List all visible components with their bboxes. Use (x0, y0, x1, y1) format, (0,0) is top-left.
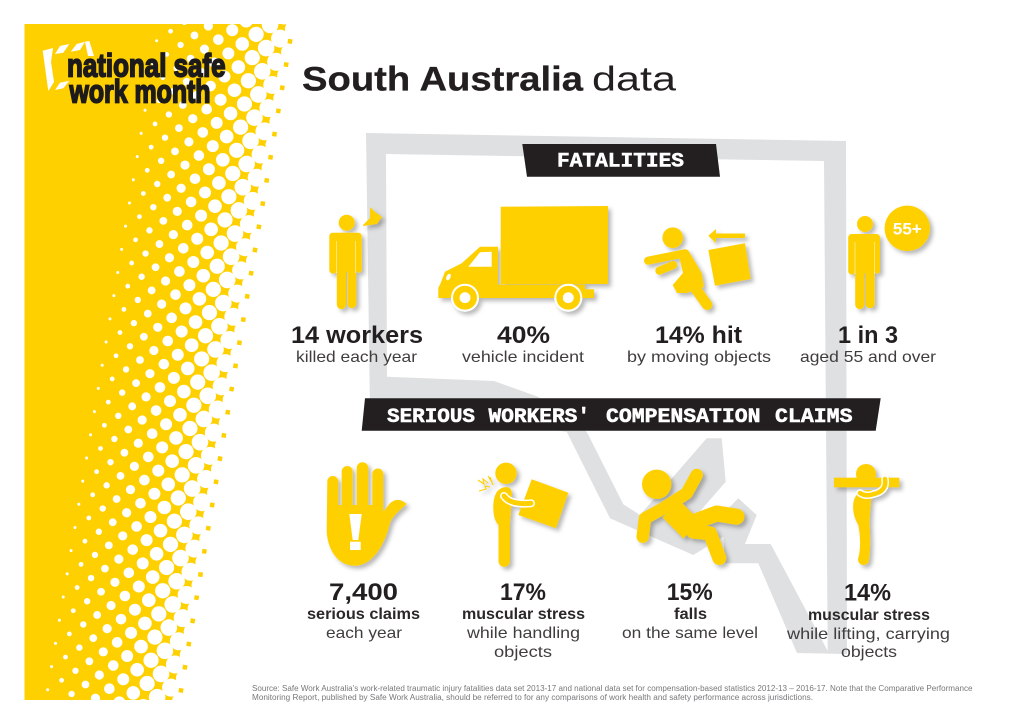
stat: 17% muscular stress while handling objects: 17% (500, 579, 546, 606)
banner: fatalities (522, 144, 720, 177)
icon: raised hand with exclamation (327, 462, 407, 566)
map outline: South Australia (366, 133, 847, 654)
source note: Source: Safe Work Australia's work-related traumatic injury fatalities data set 2013-17 and national data set for compensation-based statistics 2012-13 – 2016-17. Note that the Comparative Performance (252, 684, 973, 693)
stat: 14% muscular stress while lifting, carrying objects: muscular stress (808, 607, 930, 624)
banner: serious workers' compensation claims: SERIOUS (387, 406, 475, 429)
stat: 14% hit by moving objects (627, 322, 771, 366)
title: South Australia (302, 60, 584, 98)
logo: national safe work month: national safe (67, 48, 226, 84)
stat: 17% muscular stress while handling objects: muscular stress (462, 606, 585, 623)
stat: 40% vehicle incident (462, 322, 585, 366)
source note: Monitoring Report, published by Safe Work Australia, should be referred to for any comparisons of work health and safety performance across jurisdictions. (252, 693, 813, 702)
stat: 14 workers killed each year: 14 workers (291, 322, 423, 349)
source note (252, 684, 973, 702)
logo: national safe work month (43, 41, 226, 110)
icon: fall on the same level (642, 470, 736, 558)
stat: 40% vehicle incident: vehicle incident (462, 349, 585, 366)
banner: serious workers' compensation claims: CLAIMS (775, 406, 852, 429)
banner: serious workers' compensation claims: COMPENSATION (606, 406, 760, 429)
icon: delivery truck (438, 206, 608, 312)
stat: 15% falls on the same level: falls (674, 606, 707, 623)
stat: 7,400 serious claims each year (307, 579, 420, 642)
icon: worker with arrow (329, 207, 382, 309)
stat: 1 in 3 aged 55 and over (800, 322, 937, 366)
stat: 14 workers killed each year (291, 322, 423, 366)
icon: lifting and carrying (834, 464, 899, 565)
stat: 15% falls on the same level: 15% (667, 579, 713, 606)
halftone yellow side panel (24, 11, 294, 724)
stat: 15% falls on the same level: on the same level (622, 625, 758, 642)
stat: 14% hit by moving objects: by moving objects (627, 349, 771, 366)
icon: hit by moving object (648, 227, 751, 305)
icon: older worker with 55+ badge (848, 206, 930, 309)
banner: serious workers' compensation claims: WORKERS' (488, 406, 590, 429)
stat: 40% vehicle incident: 40% (497, 322, 550, 349)
stat: 17% muscular stress while handling objects: while handling (466, 625, 580, 642)
stat: 7,400 serious claims each year: serious claims (307, 606, 420, 623)
stat: 1 in 3 aged 55 and over: 1 in 3 (838, 322, 898, 349)
stat: 14% muscular stress while lifting, carrying objects: objects (841, 644, 897, 661)
title (302, 60, 676, 98)
icon: muscular stress while handling (478, 463, 568, 567)
stat: 15% falls on the same level (622, 579, 758, 642)
stat: 7,400 serious claims each year: 7,400 (329, 579, 398, 606)
logo: national safe work month: work month (69, 74, 210, 110)
title: data (592, 60, 676, 98)
stat: 14% muscular stress while lifting, carrying objects: while lifting, carrying (786, 626, 950, 643)
banner: fatalities: FATALITIES (557, 150, 684, 174)
stat: 14% muscular stress while lifting, carrying objects (786, 580, 950, 661)
stat: 14% hit by moving objects: 14% hit (655, 322, 742, 349)
stat: 14 workers killed each year: killed each year (296, 349, 418, 366)
banner: serious workers' compensation claims (362, 398, 881, 431)
stat: 17% muscular stress while handling objects (462, 579, 585, 661)
icon: older worker with 55+ badge: 55+ (893, 220, 922, 238)
stat: 1 in 3 aged 55 and over: aged 55 and over (800, 349, 937, 366)
stat: 14% muscular stress while lifting, carrying objects: 14% (844, 580, 891, 606)
stat: 17% muscular stress while handling objects: objects (494, 644, 552, 661)
stat: 7,400 serious claims each year: each year (326, 625, 403, 642)
